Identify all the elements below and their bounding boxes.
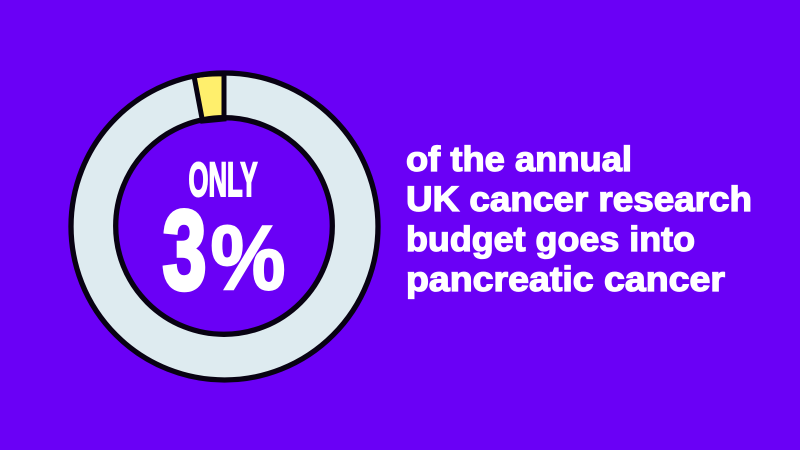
ring: remaining budget (94, 96, 356, 358)
label: ONLY: ONLY (188, 154, 258, 207)
ring outlines (71, 73, 378, 380)
donut chart: 3 percent share (71, 73, 378, 380)
digit 3: 3 (162, 188, 206, 312)
description text (406, 140, 752, 299)
description text: UK cancer research (406, 180, 752, 219)
figure: 3 percent (162, 188, 286, 312)
description text: of the annual (406, 140, 632, 179)
description text: pancreatic cancer (406, 260, 725, 299)
ring segment: pancreatic cancer 3 percent (194, 74, 224, 121)
percent sign: % (210, 208, 286, 310)
description text: budget goes into (406, 220, 695, 259)
